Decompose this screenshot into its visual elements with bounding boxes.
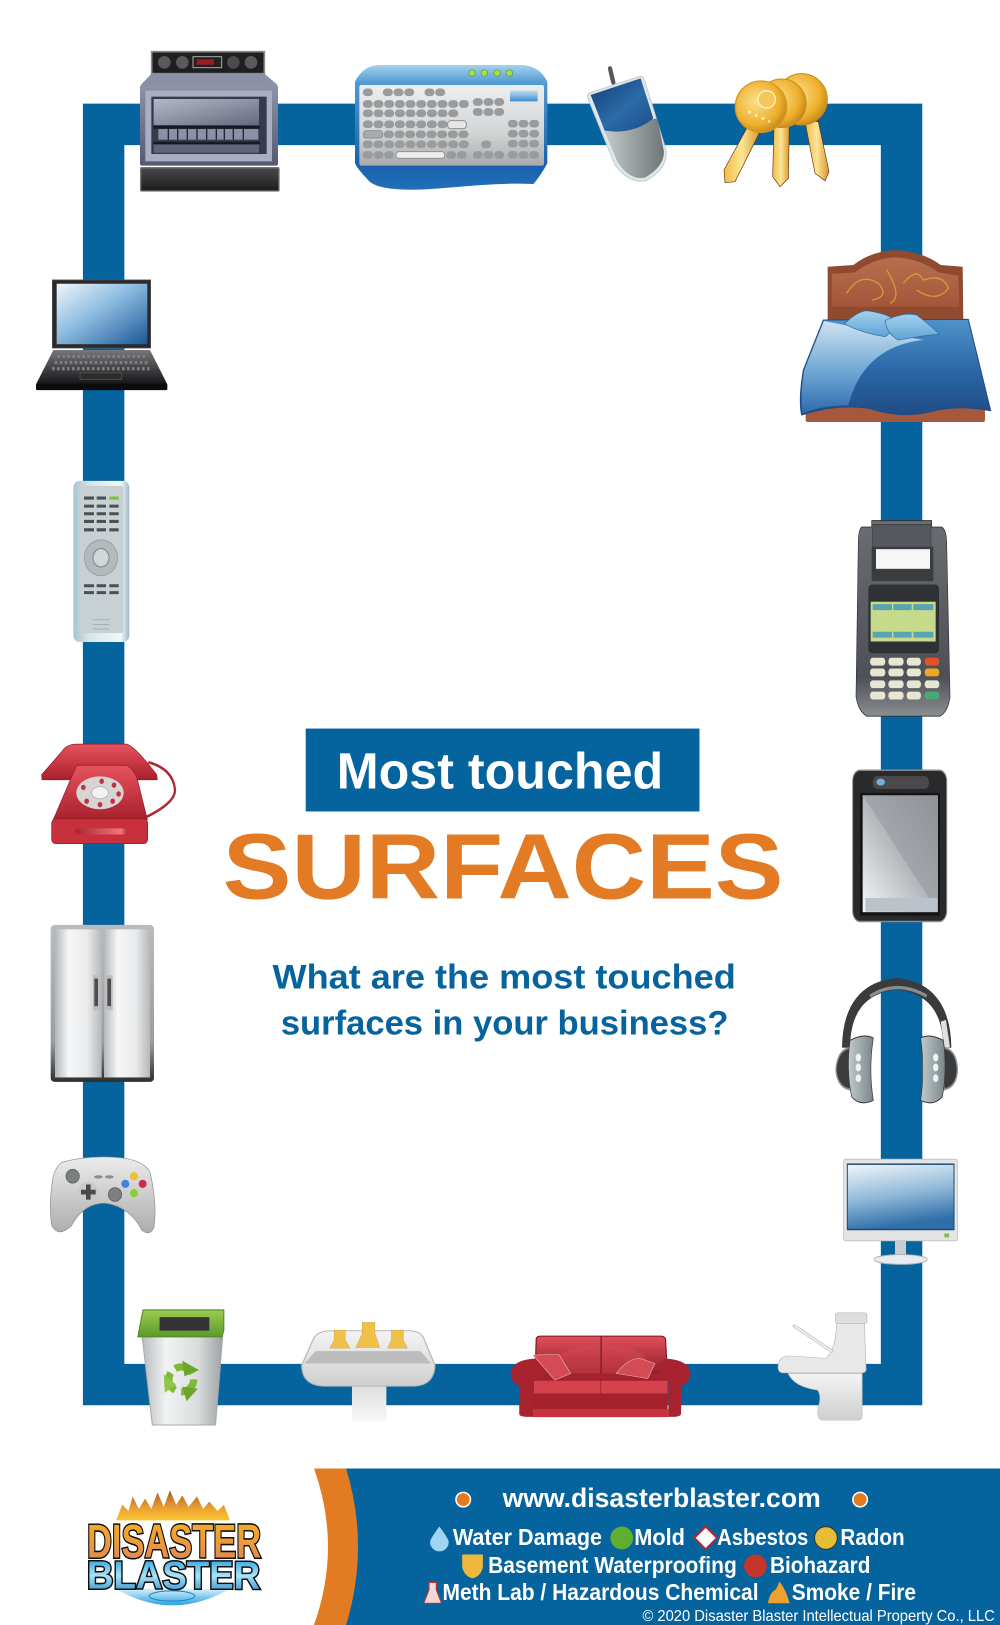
icon: flame <box>768 1581 790 1603</box>
icon: laptop <box>36 280 167 390</box>
footer services list: Biohazard <box>770 1552 870 1578</box>
icon: asbestos diamond <box>694 1527 717 1549</box>
icon: refrigerator <box>51 925 154 1082</box>
title block <box>223 729 783 919</box>
footer website line: www.disasterblaster.com <box>502 1483 821 1513</box>
icon: flask <box>424 1583 441 1603</box>
title line: Most touched: Most touched <box>337 743 663 800</box>
icon: water drop <box>430 1527 449 1551</box>
icon: keyboard <box>355 65 547 190</box>
footer services list: Smoke / Fire <box>792 1579 916 1605</box>
subtitle question <box>273 959 736 1042</box>
icon: radon <box>815 1527 837 1549</box>
title line: SURFACES: SURFACES <box>223 815 783 919</box>
footer services list: Asbestos <box>717 1524 808 1550</box>
icon: tablet phone <box>853 770 947 922</box>
logo: Disaster Blaster: BLASTER <box>87 1554 260 1598</box>
icon: remote control <box>73 481 129 642</box>
icon: monitor <box>843 1159 958 1264</box>
icon: toilet <box>778 1313 867 1420</box>
title bar <box>306 729 699 811</box>
icon: red telephone <box>42 744 175 844</box>
icon: headphones <box>836 984 957 1103</box>
footer services list: Meth Lab / Hazardous Chemical <box>442 1579 759 1605</box>
icon: sink <box>302 1322 435 1421</box>
footer services list: Water Damage <box>453 1524 602 1550</box>
icon: recycling bin <box>138 1310 224 1425</box>
icon: shield <box>462 1555 483 1578</box>
footer services list: Radon <box>840 1524 905 1550</box>
subtitle question: surfaces in your business? <box>281 1004 728 1042</box>
icon: bed <box>800 250 991 422</box>
icon: mold <box>610 1527 633 1549</box>
logo: Disaster Blaster <box>87 1490 261 1605</box>
footer: blue band <box>0 1469 1000 1625</box>
footer services list <box>424 1524 916 1605</box>
blue rectangular frame <box>83 104 922 1405</box>
icon: payment terminal <box>856 521 950 716</box>
icon: red sofa <box>511 1336 690 1417</box>
footer services list: Mold <box>634 1524 685 1550</box>
icon: oven <box>140 52 279 191</box>
subtitle question: What are the most touched <box>273 959 736 997</box>
icon: keys <box>724 74 829 187</box>
footer: orange curve <box>314 1469 358 1625</box>
footer: white logo area <box>0 1469 328 1625</box>
footer services list: Basement Waterproofing <box>488 1552 737 1578</box>
logo: Disaster Blaster: DISASTER <box>87 1516 261 1569</box>
icon: game controller <box>50 1157 155 1233</box>
icon: biohazard <box>744 1555 767 1577</box>
icon: computer mouse <box>588 68 666 181</box>
